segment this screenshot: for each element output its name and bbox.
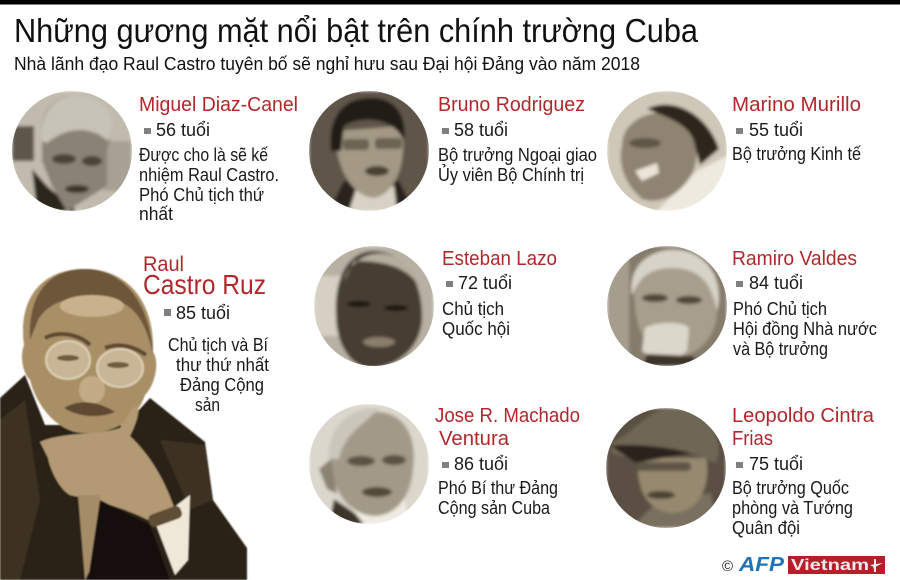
- age: 75 tuổi: [749, 454, 803, 474]
- description: [733, 298, 877, 359]
- name: Ramiro Valdes: [732, 248, 857, 270]
- logo: Vietnam+: [788, 556, 885, 574]
- description: phòng và Tướng: [732, 497, 853, 518]
- panel: Jose R. Machado Ventura: [309, 404, 580, 524]
- name: [732, 405, 875, 450]
- top black bar: [0, 0, 900, 4]
- description: Phó Chủ tịch thứ: [139, 184, 264, 205]
- age: 56 tuổi: [156, 120, 210, 140]
- description: Bộ trưởng Quốc: [732, 477, 849, 498]
- description: Bộ trưởng Kinh tế: [732, 143, 862, 164]
- age: 58 tuổi: [454, 120, 508, 140]
- name: Jose R. Machado: [435, 405, 580, 427]
- age: 85 tuổi: [176, 303, 230, 323]
- description: Hội đồng Nhà nước: [733, 318, 877, 339]
- portrait: Ramiro Valdes: [607, 246, 727, 366]
- panel: Ramiro Valdes: [607, 246, 877, 366]
- panel: Esteban Lazo: [314, 246, 557, 368]
- portrait: Esteban Lazo: [314, 246, 434, 368]
- description: Ủy viên Bộ Chính trị: [438, 164, 584, 185]
- description: [139, 144, 279, 224]
- name: Esteban Lazo: [442, 248, 557, 270]
- portrait: Miguel Diaz-Canel: [12, 91, 132, 211]
- portrait: Bruno Rodriguez: [309, 91, 429, 211]
- description: Chủ tịch: [442, 298, 504, 319]
- description: [442, 298, 510, 339]
- portrait: Raul Castro Ruz: [0, 269, 247, 580]
- description: Cộng sản Cuba: [438, 497, 551, 518]
- name: Frias: [732, 428, 773, 450]
- panel: Bruno Rodriguez: [309, 91, 597, 211]
- panel: Miguel Diaz-Canel: [12, 91, 298, 224]
- description: [438, 477, 558, 518]
- logo: AFP: AFP: [738, 554, 785, 576]
- description: Bộ trưởng Ngoại giao: [438, 144, 597, 165]
- name: Raul: [143, 253, 184, 276]
- name: Castro Ruz: [143, 269, 266, 300]
- age: 86 tuổi: [454, 454, 508, 474]
- age: 55 tuổi: [749, 120, 803, 140]
- credit logos: [722, 554, 885, 576]
- name: Bruno Rodriguez: [438, 94, 585, 116]
- description: [438, 144, 597, 185]
- description: Được cho là sẽ kế: [139, 144, 269, 165]
- description: Chủ tịch và Bí: [168, 334, 269, 355]
- description: nhiệm Raul Castro.: [139, 164, 279, 185]
- age: 84 tuổi: [749, 273, 803, 293]
- description: sản: [195, 394, 220, 415]
- name: Miguel Diaz-Canel: [139, 94, 298, 116]
- panel: Marino Murillo: [607, 91, 862, 211]
- portrait: Jose R. Machado Ventura: [309, 404, 429, 524]
- title: Những gương mặt nổi bật trên chính trường Cuba: [14, 12, 699, 49]
- description: Quốc hội: [442, 318, 510, 339]
- portrait: Leopoldo Cintra Frias: [606, 408, 726, 528]
- description: thư thứ nhất: [176, 354, 269, 375]
- portrait: Marino Murillo: [607, 91, 727, 211]
- name: Ventura: [439, 428, 510, 450]
- panel: Raul Castro text: [143, 253, 269, 415]
- description: Quân đội: [732, 517, 800, 538]
- description: Đảng Cộng: [180, 374, 264, 395]
- description: và Bộ trưởng: [733, 338, 828, 359]
- name: Leopoldo Cintra: [732, 405, 875, 427]
- copyright symbol: ©: [722, 558, 733, 575]
- description: Phó Bí thư Đảng: [438, 477, 558, 498]
- description: [732, 477, 853, 538]
- panel: Leopoldo Cintra Frias: [606, 405, 875, 538]
- name: [143, 253, 266, 300]
- name: [435, 405, 580, 450]
- age: 72 tuổi: [458, 273, 512, 293]
- description: nhất: [139, 203, 173, 224]
- description: [168, 334, 269, 415]
- subtitle: Nhà lãnh đạo Raul Castro tuyên bố sẽ nghỉ hưu sau Đại hội Đảng vào năm 2018: [14, 53, 640, 74]
- description: Phó Chủ tịch: [733, 298, 827, 319]
- name: Marino Murillo: [732, 94, 861, 116]
- logo: Vietnam+: Vietnam: [791, 557, 869, 574]
